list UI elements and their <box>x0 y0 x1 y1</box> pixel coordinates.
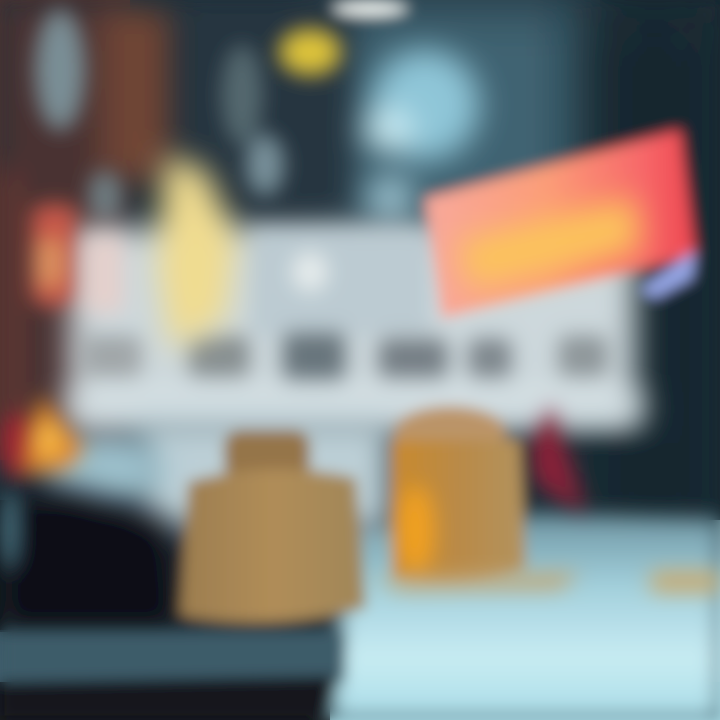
ceiling light: white <box>332 0 408 16</box>
flame at left <box>0 395 84 477</box>
billboard <box>425 130 695 318</box>
yellow flame <box>158 155 236 350</box>
floor <box>45 420 720 720</box>
gold spill on floor <box>375 570 720 594</box>
brown wall on left <box>0 0 170 460</box>
pale streaks on upper wall <box>36 10 283 219</box>
row of dark data blocks <box>82 332 608 380</box>
ceiling light: yellow <box>280 30 340 74</box>
dark foreground left <box>0 490 345 720</box>
light blue glow <box>364 50 479 220</box>
white panel <box>70 228 640 426</box>
gold container right <box>392 406 526 583</box>
gold container left <box>180 430 366 622</box>
left tall card <box>32 205 124 313</box>
red object right <box>532 405 585 515</box>
